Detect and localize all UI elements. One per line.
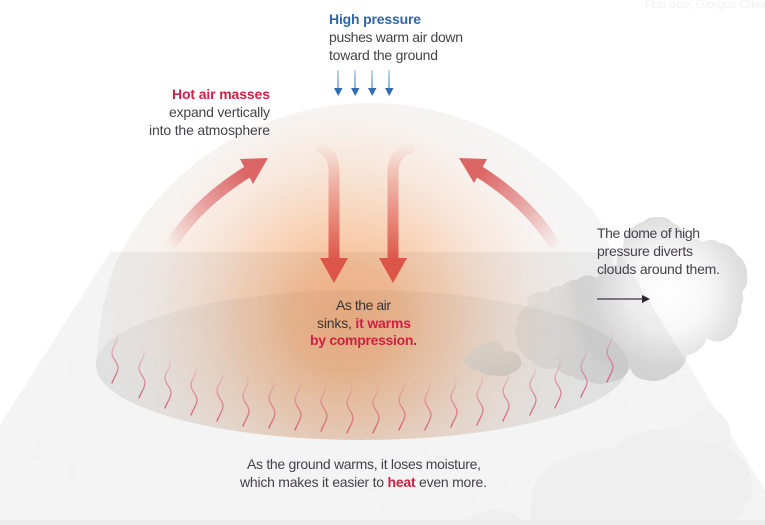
text: warms by compression: sinks, it warms <box>317 315 411 331</box>
text: high pressure <box>329 11 463 63</box>
text: dome diverts clouds: The dome of high <box>597 225 700 241</box>
text: hot air masses: into the atmosphere <box>149 122 270 138</box>
text: hot air masses: expand vertically <box>169 104 270 120</box>
text: hot air masses <box>149 86 270 138</box>
text: warms by compression: As the air <box>336 297 391 313</box>
cloud shadows on ground <box>468 409 752 520</box>
right rising arrow <box>459 158 558 250</box>
large cloud <box>515 217 747 384</box>
text: high pressure: High pressure <box>329 11 421 27</box>
text: warms by compression: by compression. <box>310 332 417 348</box>
text: dome diverts clouds: clouds around them. <box>597 261 720 277</box>
small cloud <box>465 341 521 376</box>
left sinking arrow <box>316 147 348 283</box>
orange heat glow <box>96 103 628 440</box>
dome <box>96 103 628 440</box>
bottom band <box>0 520 765 525</box>
text: high pressure: pushes warm air down <box>329 29 463 45</box>
text: high pressure: toward the ground <box>329 47 438 63</box>
text: warms by compression <box>310 297 417 348</box>
ground plane <box>0 252 765 525</box>
right sinking arrow <box>379 147 414 283</box>
text: ground moisture: which makes it easier to heat even more. <box>239 474 487 490</box>
arrow: cloud direction <box>597 295 650 303</box>
text: ground moisture: As the ground warms, it loses moisture, <box>247 456 481 472</box>
left rising arrow <box>168 158 268 250</box>
heat waves <box>112 331 613 433</box>
text: ground moisture <box>239 456 487 490</box>
text: dome diverts clouds: pressure diverts <box>597 243 693 259</box>
heated ground ellipse <box>96 290 628 440</box>
text: dome diverts clouds <box>597 225 720 277</box>
text: hot air masses: Hot air masses <box>172 86 270 102</box>
high pressure arrows <box>334 70 394 96</box>
